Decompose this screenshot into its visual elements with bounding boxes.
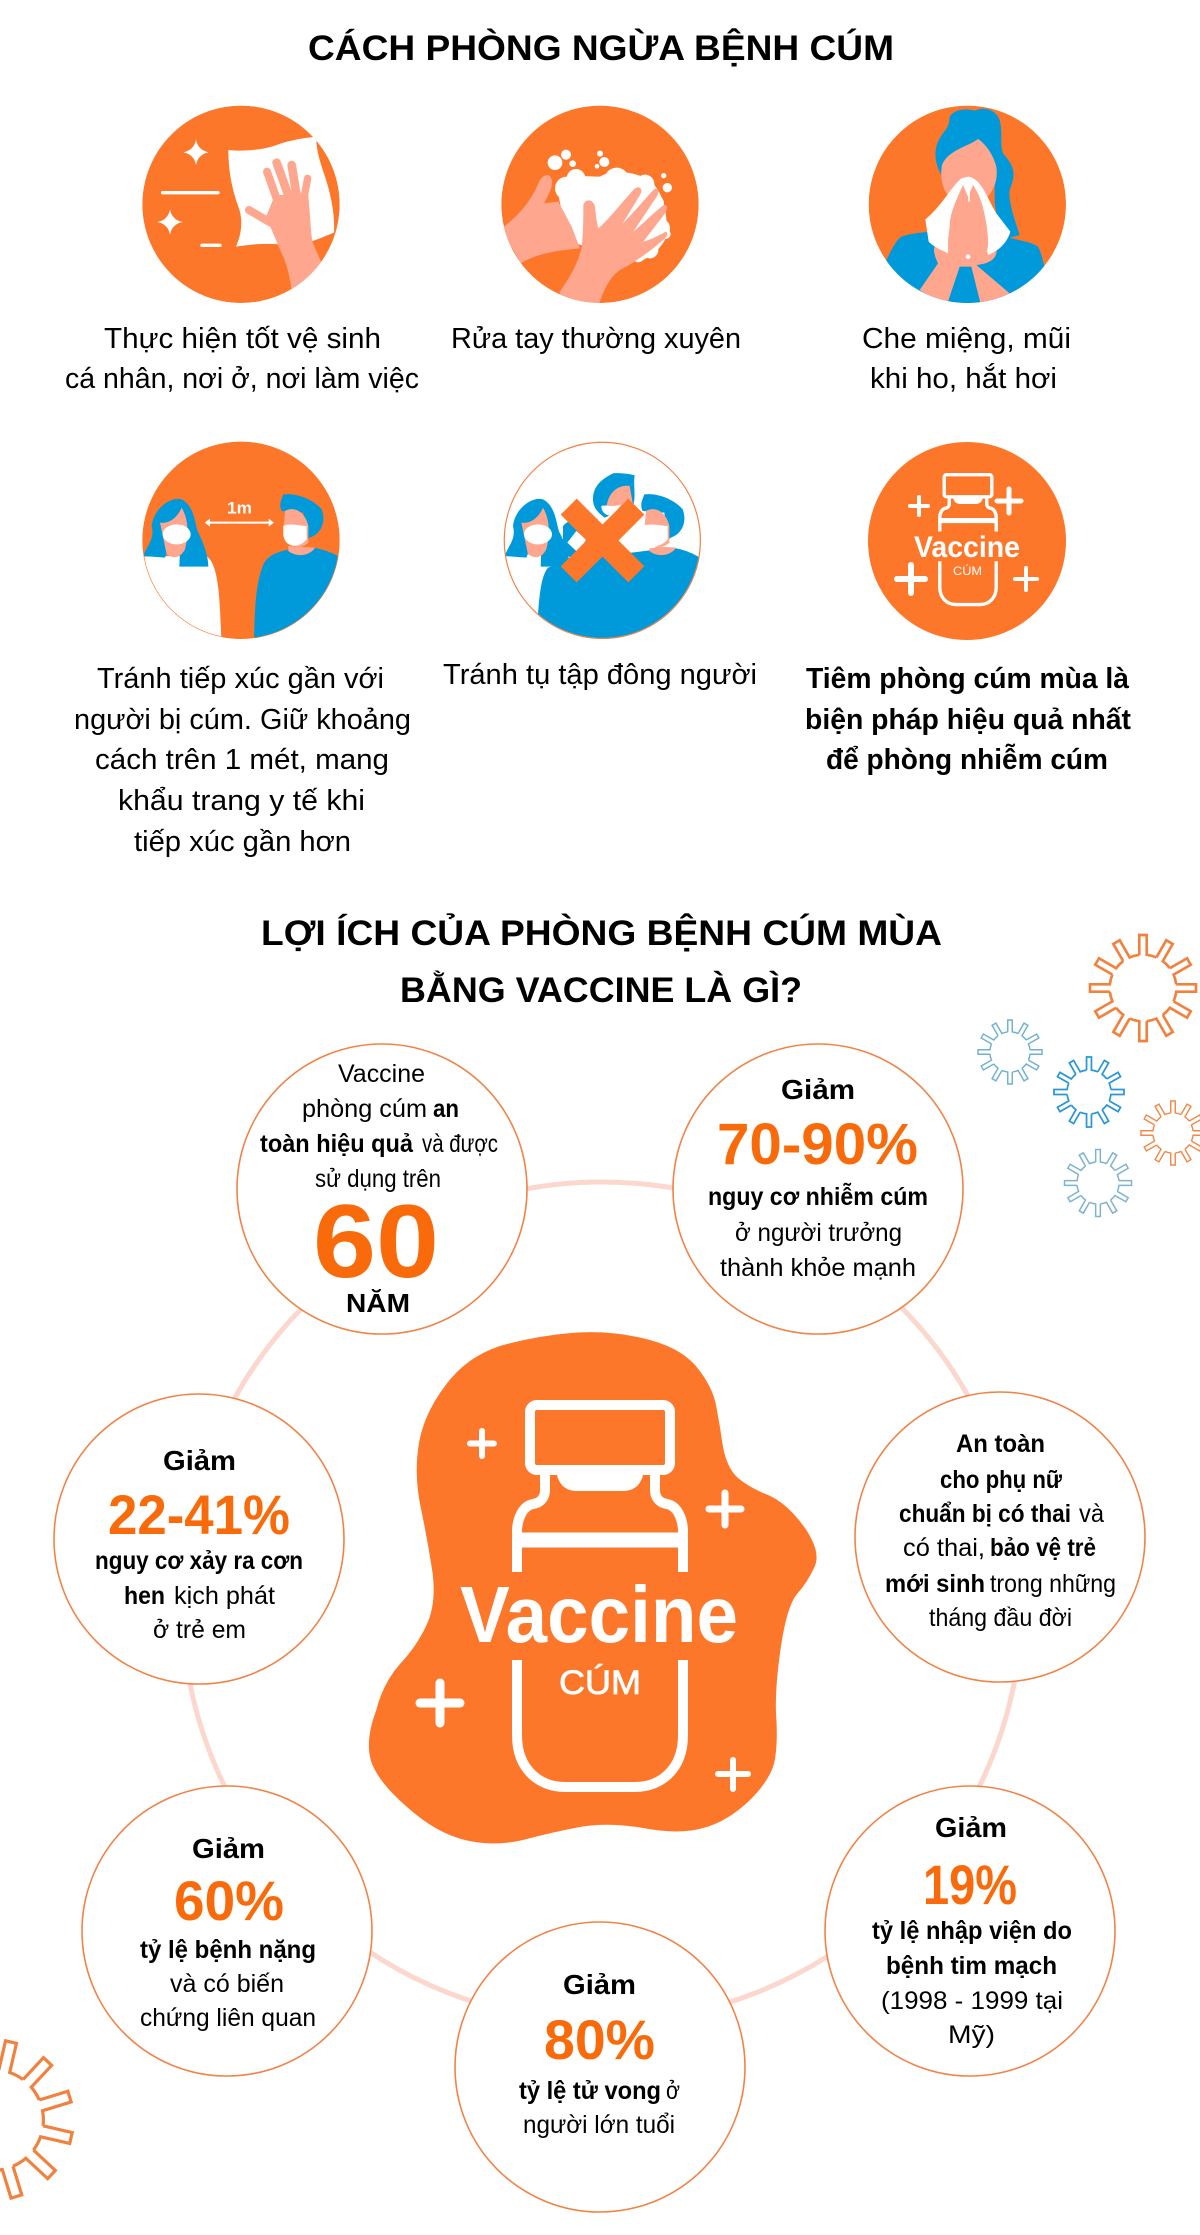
text: avoid crowds: Tránh tụ tập đông người [443, 659, 757, 691]
panel: cover mouth [862, 106, 1071, 395]
bubble: 80%: Giảm [563, 1969, 636, 2000]
text: keep distance: Tránh tiếp xúc gần với [97, 663, 384, 695]
bubble: 19%: Giảm [935, 1812, 1007, 1843]
illustration: central vaccine blob [369, 1332, 817, 1844]
illustration: central vaccine blob: Vaccine [460, 1570, 738, 1659]
bubble: 80%: người lớn tuổi [523, 2111, 675, 2139]
bubble: 19%: 19% [923, 1853, 1017, 1916]
bubble: 19% [825, 1786, 1115, 2076]
icon: two people one metre apart: 1m [227, 498, 252, 517]
bubble: 70-90%: nguy cơ nhiễm cúm [708, 1181, 928, 1211]
heading: benefits of flu vaccine: BẰNG VACCINE LÀ GÌ? [400, 970, 802, 1010]
bubble: 80%: ở [666, 2077, 680, 2105]
bubble: 22-41% [54, 1394, 344, 1684]
icon: hand wiping with cloth [142, 106, 340, 303]
bubble: 80%: 80% [544, 2008, 655, 2071]
bubble: 60%: 60% [174, 1869, 284, 1932]
bubble: safe for pregnant women [855, 1392, 1145, 1682]
panel: avoid crowds [443, 442, 757, 691]
icon: virus cluster top right [978, 935, 1200, 1216]
text: hygiene: Thực hiện tốt vệ sinh [104, 323, 381, 355]
bubble: 70-90% [673, 1044, 963, 1334]
bubble: 60 years: sử dụng trên [315, 1165, 441, 1193]
text: vaccination advice: Tiêm phòng cúm mùa là [806, 663, 1130, 695]
bubble: 19%: bệnh tim mạch [886, 1952, 1057, 1980]
text: hygiene [65, 323, 419, 395]
heading: benefits of flu vaccine: LỢI ÍCH CỦA PHÒNG BỆNH CÚM MÙA [261, 913, 942, 953]
illustration: central vaccine blob: CÚM [559, 1664, 641, 1702]
bubble: 19%: Mỹ) [948, 2021, 995, 2049]
bubble: 60%: và có biến [170, 1970, 284, 1998]
bubble: safe for pregnant women: chuẩn bị có thai [899, 1500, 1071, 1528]
bubble: safe for pregnant women: cho phụ nữ [940, 1466, 1063, 1494]
text: vaccination advice [805, 663, 1131, 776]
bubble: 60% [82, 1786, 372, 2076]
bubble: safe for pregnant women: tháng đầu đời [929, 1604, 1072, 1632]
panel: get vaccinated [805, 442, 1131, 776]
text: cover mouth [862, 323, 1071, 395]
bubble: safe for pregnant women: có thai, [903, 1534, 985, 1562]
bubble: safe for pregnant women: trong những [990, 1570, 1116, 1598]
panel: hygiene [65, 106, 419, 395]
bubble: safe for pregnant women: mới sinh [885, 1570, 985, 1598]
bubble: safe for pregnant women: An toàn [956, 1430, 1045, 1458]
text: keep distance: người bị cúm. Giữ khoảng [74, 704, 411, 736]
bubble: 22-41%: kịch phát [174, 1582, 275, 1610]
text: cover mouth: khi ho, hắt hơi [870, 362, 1057, 395]
bubble: 60 years: và được [422, 1130, 498, 1158]
text: keep distance: cách trên 1 mét, mang [95, 744, 389, 776]
text: keep distance: tiếp xúc gần hơn [134, 826, 351, 858]
bubble: 80%: tỷ lệ tử vong [519, 2077, 661, 2105]
bubble: 60%: Giảm [192, 1833, 265, 1864]
text: wash hands: Rửa tay thường xuyên [451, 323, 741, 355]
bubble: 70-90%: ở người trưởng [735, 1219, 902, 1247]
bubble: 19%: (1998 - 1999 tại [881, 1987, 1063, 2015]
bubble: 60%: chứng liên quan [140, 2004, 316, 2032]
text: keep distance [74, 663, 411, 858]
bubble: 60 years: phòng cúm [302, 1095, 427, 1123]
bubble: 60 years: toàn hiệu quả [260, 1130, 414, 1158]
bubble: 60%: tỷ lệ bệnh nặng [140, 1936, 316, 1964]
text: vaccination advice: để phòng nhiễm cúm [826, 742, 1108, 776]
icon: virus bottom left [0, 2024, 89, 2216]
text: cover mouth: Che miệng, mũi [862, 323, 1071, 355]
bubble: 60 years: 60 [313, 1184, 439, 1300]
bubble: 22-41%: nguy cơ xảy ra cơn [95, 1547, 303, 1575]
bubble: 22-41%: 22-41% [108, 1483, 290, 1546]
text: hygiene: cá nhân, nơi ở, nơi làm việc [65, 363, 419, 395]
text: keep distance: khẩu trang y tế khi [118, 785, 365, 817]
icon: washing hands [498, 106, 699, 307]
title: flu prevention: CÁCH PHÒNG NGỪA BỆNH CÚM [308, 28, 894, 68]
icon: two people one metre apart [142, 442, 340, 639]
bubble: 19%: tỷ lệ nhập viện do [872, 1917, 1072, 1945]
bubble: 70-90%: thành khỏe mạnh [720, 1254, 916, 1282]
bubble: 60 years: Vaccine [338, 1060, 425, 1088]
bubble: 60 years: NĂM [346, 1288, 410, 1318]
bubble: 70-90%: 70-90% [717, 1112, 918, 1177]
panel: keep distance [74, 442, 411, 858]
bubble: 70-90%: Giảm [781, 1074, 855, 1105]
icon: vaccine badge: Vaccine [914, 531, 1020, 564]
bubble: 60 years: an [433, 1095, 459, 1123]
icon: vaccine badge [868, 442, 1066, 640]
heading: benefits of flu vaccine [261, 913, 942, 1010]
icon: woman sneezing in tissue [869, 106, 1066, 307]
panel: hand washing [451, 106, 741, 355]
bubble: 22-41%: hen [124, 1582, 165, 1610]
icon: vaccine badge: CÚM [953, 563, 982, 578]
bubble: 60 years [237, 1044, 527, 1334]
bubble: safe for pregnant women: bảo vệ trẻ [990, 1534, 1096, 1562]
connecting ring [182, 1182, 1022, 2022]
bubble: safe for pregnant women: và [1079, 1500, 1104, 1528]
bubble: 80% [455, 1922, 745, 2212]
icon: crowd crossed out [498, 442, 706, 649]
bubble: 22-41%: Giảm [163, 1445, 236, 1476]
bubble: 22-41%: ở trẻ em [153, 1616, 246, 1644]
text: vaccination advice: biện pháp hiệu quả nhất [805, 704, 1131, 736]
